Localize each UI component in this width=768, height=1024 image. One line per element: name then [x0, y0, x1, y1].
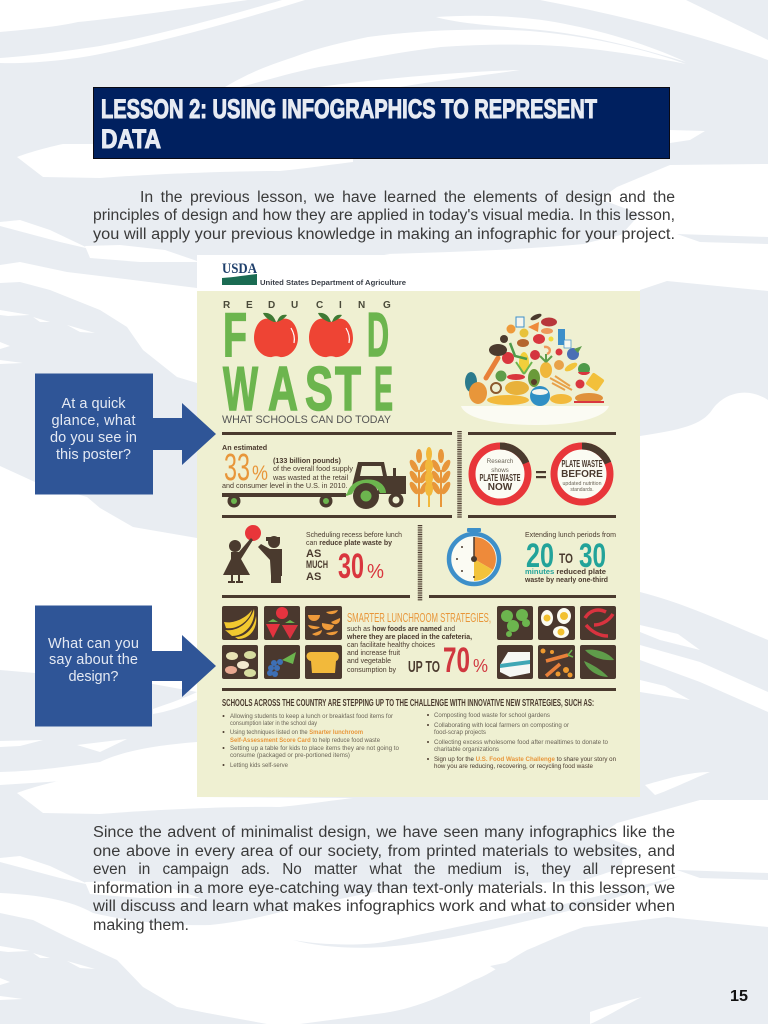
tile: strawberries — [266, 607, 298, 639]
callout: design question: What can you — [48, 636, 139, 652]
tile: peas — [584, 650, 614, 677]
callout: quick glance question: At a quick — [62, 396, 126, 412]
tile: orange slices — [308, 610, 340, 636]
icon: tractor and trailer — [222, 462, 406, 509]
text: smarter lunchroom strategies: 70 — [443, 641, 470, 680]
callout: design question — [35, 606, 216, 726]
list: left strategies: Setting up a table for kids to place items they are not going to — [230, 745, 400, 752]
stat: 33 percent wasted: and consumer level in the U.S. in 2010. — [222, 481, 347, 490]
stat: recess 30 percent: 30 — [338, 547, 364, 586]
callout: quick glance question: do you see in — [50, 430, 137, 446]
heading: reducing food waste: REDUCING — [223, 300, 391, 311]
text: smarter lunchroom strategies — [346, 610, 491, 680]
stat: recess 30 percent: AS — [306, 548, 321, 560]
heading: reducing food waste: F — [223, 301, 247, 370]
list: left strategies — [222, 713, 400, 769]
list: right strategies — [427, 712, 617, 770]
food tiles — [222, 606, 616, 679]
text: smarter lunchroom strategies: consumption by — [347, 665, 396, 674]
tile: bananas — [224, 609, 256, 639]
stat: 33 percent wasted: was wasted at the retail — [272, 473, 349, 482]
callout: design question: design? — [68, 669, 118, 685]
chart: plate waste comparison: PLATE WASTE — [480, 473, 521, 484]
chart: plate waste comparison: shows — [491, 467, 509, 474]
stat: lunch period 20 to 30: waste by nearly one-third — [524, 577, 608, 584]
chart: plate waste comparison: PLATE WASTE — [562, 459, 603, 470]
stat: recess 30 percent: AS — [306, 571, 321, 583]
stat: lunch period 20 to 30 — [524, 530, 616, 584]
USDA logo — [222, 261, 406, 287]
title text — [101, 94, 597, 154]
heading: reducing food waste: W — [223, 355, 258, 424]
panel: food waste poster — [197, 255, 640, 797]
panel: food waste poster: E — [374, 355, 393, 424]
text: smarter lunchroom strategies: where they are placed in the cafeteria, — [346, 632, 472, 641]
icon: stopwatch — [449, 528, 499, 584]
title text: LESSON 2: USING INFOGRAPHICS TO REPRESENT — [101, 94, 597, 124]
list: left strategies: Letting kids self-serve — [230, 762, 289, 769]
list: right strategies: Composting food waste for school gardens — [434, 712, 550, 719]
list: right strategies: Collecting excess wholesome food after mealtimes to donate to — [434, 739, 609, 746]
list: right strategies: food-scrap projects — [434, 729, 486, 736]
stat: lunch period 20 to 30: TO — [559, 550, 573, 566]
chart: plate waste comparison — [472, 446, 610, 502]
callout: quick glance question: glance, what — [52, 413, 136, 429]
page number: 15 — [730, 988, 748, 1005]
text: smarter lunchroom strategies: and increase fruit — [347, 648, 400, 657]
icon: wheat — [408, 447, 452, 507]
stat: lunch period 20 to 30: 30 — [579, 537, 606, 575]
list: left strategies: Allowing students to keep a lunch or breakfast food items for — [230, 713, 393, 720]
stat: lunch period 20 to 30: 20 — [526, 537, 554, 575]
text: smarter lunchroom strategies: such as how foods are named and — [347, 624, 455, 633]
callout: quick glance question — [35, 374, 216, 494]
closing paragraph: information in a more eye-catching way than text-only materials. In this lesson, we — [93, 880, 675, 897]
intro paragraph — [93, 189, 675, 243]
intro paragraph: principles of design and how they are applied in today's visual media. In this lesson, — [93, 207, 675, 224]
chart: plate waste comparison: NOW — [488, 482, 513, 493]
tile: grapes — [267, 652, 296, 677]
title text: DATA — [101, 124, 161, 154]
title banner — [94, 88, 670, 158]
stat: 33 percent wasted: % — [252, 462, 268, 485]
stat: recess 30 percent: Scheduling recess before lunch — [306, 530, 402, 539]
stat: recess 30 percent: MUCH — [306, 559, 328, 571]
stat: recess 30 percent: % — [367, 561, 384, 583]
tile: bread — [306, 652, 339, 673]
heading: reducing food waste: WHAT SCHOOLS CAN DO TODAY — [222, 414, 392, 426]
tile: eggs — [541, 608, 571, 638]
heading: reducing food waste: T — [335, 355, 361, 424]
text: smarter lunchroom strategies: and vegetable — [347, 656, 391, 665]
list: right strategies: Collaborating with local farmers on composting or — [434, 722, 569, 729]
tile: apple slices — [225, 651, 256, 677]
text: smarter lunchroom strategies: UP TO — [408, 659, 440, 676]
intro paragraph: you will apply your previous knowledge in making an infographic for your project. — [93, 226, 675, 243]
list: left strategies: Self-Assessment Score Card to help reduce food waste — [230, 737, 381, 744]
tile: milk cartons — [500, 652, 530, 677]
USDA logo: USDA — [222, 261, 257, 277]
closing paragraph: Since the advent of minimalist design, we have seen many infographics like the — [93, 824, 675, 841]
USDA logo: United States Department of Agriculture — [260, 278, 406, 287]
stat: recess 30 percent: can reduce plate waste by — [306, 538, 392, 547]
tile: broccoli — [501, 609, 530, 637]
closing paragraph — [92, 824, 676, 934]
heading: reducing food waste: A — [268, 355, 298, 424]
stat: 33 percent wasted: 33 — [224, 447, 250, 489]
list: right strategies: Sign up for the U.S. Food Waste Challenge to share your story on — [434, 756, 617, 763]
icon: food pyramid on plate — [461, 312, 609, 425]
stat: lunch period 20 to 30: minutes reduced plate — [525, 569, 606, 576]
stat: 33 percent wasted: (133 billion pounds) — [273, 456, 341, 465]
chart: plate waste comparison: standards. — [570, 487, 594, 493]
closing paragraph: one above in every area of our society, from printed materials to websites, and — [93, 843, 675, 860]
stat: 33 percent wasted — [222, 443, 353, 490]
text: smarter lunchroom strategies: can facilitate healthy choices — [347, 640, 435, 649]
list: left strategies: consumption later in the school day — [230, 720, 318, 727]
list: right strategies: charitable organizations — [434, 746, 499, 753]
heading: reducing food waste: D — [367, 301, 389, 370]
heading: reducing food waste: S — [305, 355, 333, 424]
callout: quick glance question: this poster? — [56, 447, 131, 463]
closing paragraph: even in campaign ads. No matter what the medium is, they all represent — [93, 861, 676, 878]
heading: reducing food waste — [222, 300, 393, 426]
stat: lunch period 20 to 30: Extending lunch periods from — [525, 530, 616, 539]
closing paragraph: will discuss and learn what makes infographics work and what to consider when — [92, 898, 675, 915]
callout: design question: say about the — [49, 652, 138, 668]
chart: plate waste comparison: Research — [487, 458, 514, 465]
stat: 33 percent wasted: An estimated — [222, 443, 267, 452]
list: left strategies: consume (packaged or pre-portioned items) — [230, 752, 350, 759]
tile: chili peppers — [585, 610, 613, 636]
stat: 33 percent wasted: of the overall food supply — [273, 464, 353, 473]
intro paragraph: In the previous lesson, we have learned the elements of design and the — [140, 189, 675, 206]
list: left strategies: Using techniques listed on the Smarter lunchroom — [230, 729, 363, 736]
chart: plate waste comparison: BEFORE — [561, 469, 603, 480]
stat: recess 30 percent — [306, 530, 402, 586]
icon: children playing with ball — [223, 525, 282, 583]
text: smarter lunchroom strategies: SMARTER LUNCHROOM STRATEGIES, — [347, 610, 491, 625]
list: right strategies: how you are reducing, recovering, or recycling food waste — [434, 763, 594, 770]
chart: plate waste comparison: updated nutrition — [562, 481, 602, 487]
closing paragraph: making them. — [93, 917, 189, 934]
text: smarter lunchroom strategies: % — [473, 656, 488, 676]
tile: carrots — [540, 648, 573, 678]
